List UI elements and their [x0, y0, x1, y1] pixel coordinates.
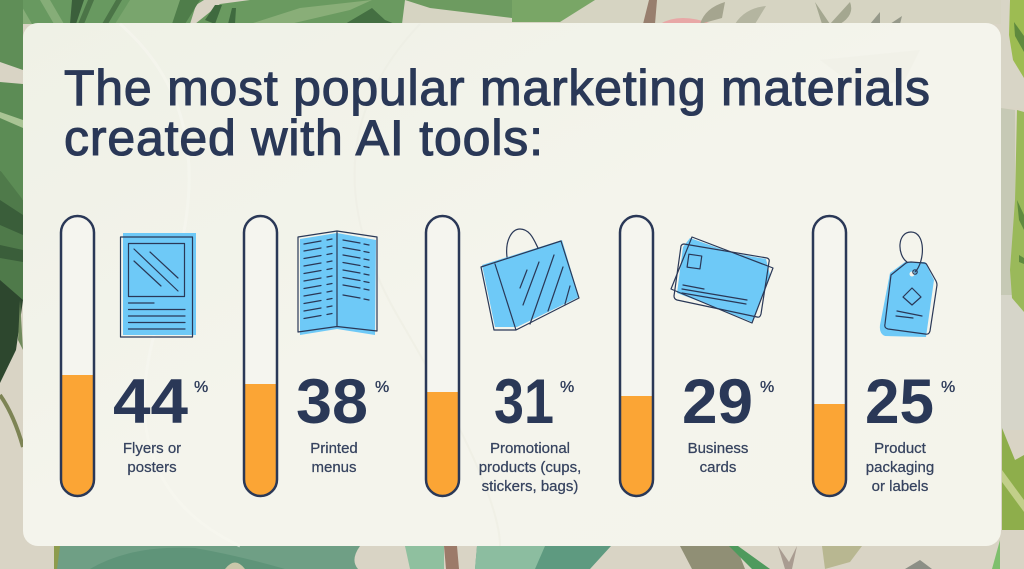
- value: 44%: 44: [113, 367, 188, 437]
- label: promotional products: Promotional: [490, 440, 570, 457]
- value: 25%: %: [941, 379, 955, 396]
- title: [64, 60, 930, 166]
- label: product packaging or labels: packaging: [866, 459, 934, 476]
- label: promotional products: stickers, bags): [482, 478, 578, 495]
- value: 31%: 31: [494, 367, 554, 437]
- value: 38%: 38: [296, 367, 368, 437]
- label: promotional products: [479, 440, 581, 495]
- label: flyers or posters: [123, 440, 181, 476]
- label: business cards: [688, 440, 748, 476]
- label: business cards: cards: [700, 459, 736, 476]
- value: 29%: 29: [682, 367, 753, 437]
- gauge: 44%: [61, 216, 94, 496]
- icon: business cards: [671, 237, 773, 323]
- value: 25%: 25: [865, 367, 934, 437]
- icon: price tag: [880, 232, 937, 337]
- label: business cards: Business: [688, 440, 748, 457]
- label: flyers or posters: Flyers or: [123, 440, 181, 457]
- gauge: 29%: [620, 216, 653, 496]
- label: product packaging or labels: Product: [874, 440, 927, 457]
- label: printed menus: Printed: [310, 440, 358, 457]
- gauge: 25%: [813, 216, 846, 496]
- column: business cards 29%: [620, 216, 774, 496]
- value: 29%: %: [760, 379, 774, 396]
- value: 38%: %: [375, 379, 389, 396]
- label: printed menus: [310, 440, 358, 476]
- column: printed menus 38%: [244, 216, 389, 496]
- label: flyers or posters: posters: [127, 459, 177, 476]
- gauge: 38%: [244, 216, 277, 496]
- icon: shopping bag: [481, 229, 579, 330]
- gauge: 31%: [426, 216, 459, 496]
- title: created with AI tools:: [64, 110, 543, 166]
- column: promotional products 31%: [426, 216, 581, 496]
- column: product packaging 25%: [813, 216, 955, 496]
- column: flyers or posters 44%: [61, 216, 208, 496]
- label: product packaging or labels: or labels: [872, 478, 928, 495]
- label: promotional products: products (cups,: [479, 459, 581, 476]
- icon: folded menu: [298, 231, 377, 335]
- value: 31%: %: [560, 379, 574, 396]
- icon: poster: [120, 233, 196, 337]
- label: product packaging or labels: [866, 440, 934, 495]
- value: 44%: %: [194, 379, 208, 396]
- label: printed menus: menus: [311, 459, 357, 476]
- title: The most popular marketing materials: [64, 60, 930, 116]
